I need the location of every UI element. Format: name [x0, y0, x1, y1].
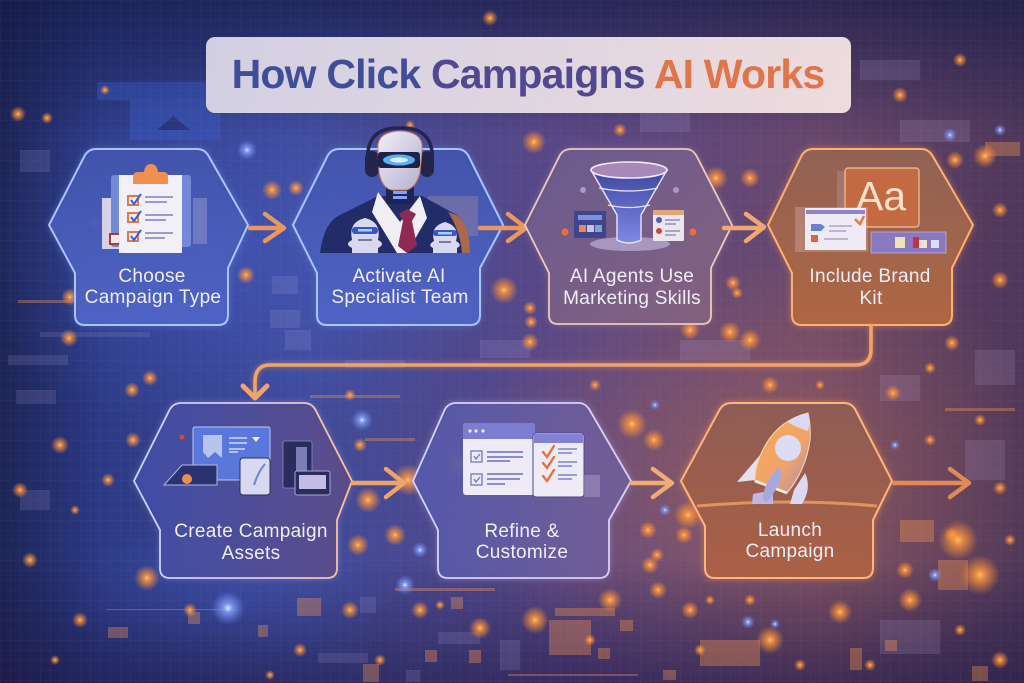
panel 3: AI agents use marketing skills — [525, 149, 732, 324]
icon: rocket — [737, 413, 810, 504]
label: step 4: Include Brand — [809, 266, 931, 287]
arrow 3 to 4 — [724, 214, 764, 241]
label: step 6: Customize — [476, 542, 568, 563]
label: step 5: Create Campaign — [174, 521, 328, 542]
title banner — [206, 37, 851, 113]
panel 5: create campaign assets — [134, 403, 352, 578]
icon: funnel with dashboards — [562, 162, 696, 251]
label: step 4: Kit — [859, 288, 883, 309]
label: step 5: Assets — [222, 543, 280, 564]
label: step 1: Campaign Type — [85, 287, 221, 308]
arrow 5 to 6 — [353, 469, 404, 497]
label: step 3: Marketing Skills — [563, 288, 701, 309]
label: step 3: AI Agents Use — [570, 266, 694, 287]
icon: refine windows with checklists — [463, 423, 600, 497]
label: step 1: Choose — [118, 266, 186, 287]
label: step 2: Activate AI — [352, 266, 446, 287]
arrow 6 to 7 — [632, 469, 672, 497]
label: step 7: Launch — [758, 520, 822, 541]
panel 4: include brand kit — [768, 149, 973, 325]
arrow 2 to 3 — [480, 214, 526, 241]
title banner: How Click Campaigns AI Works — [232, 51, 824, 97]
icon: clipboard checklist — [102, 164, 207, 253]
icon: campaign asset cards — [164, 427, 330, 495]
icon: brand kit typography and palette: Aa — [856, 173, 906, 219]
icon: AI robot specialist with helpers — [320, 128, 470, 253]
panel 2: activate AI specialist team — [293, 128, 503, 325]
label: step 2: Specialist Team — [331, 287, 469, 308]
panel 6: refine and customize — [413, 403, 631, 578]
connector arrow from row 1 to row 2 — [243, 326, 871, 398]
arrow 1 to 2 — [250, 214, 284, 241]
arrow out of launch — [894, 469, 969, 497]
panel 7: launch campaign — [681, 403, 892, 578]
label: step 6: Refine & — [484, 521, 560, 542]
label: step 7: Campaign — [745, 541, 835, 562]
icon: brand kit typography and palette — [795, 168, 946, 253]
panel 1: choose campaign type — [49, 149, 248, 325]
